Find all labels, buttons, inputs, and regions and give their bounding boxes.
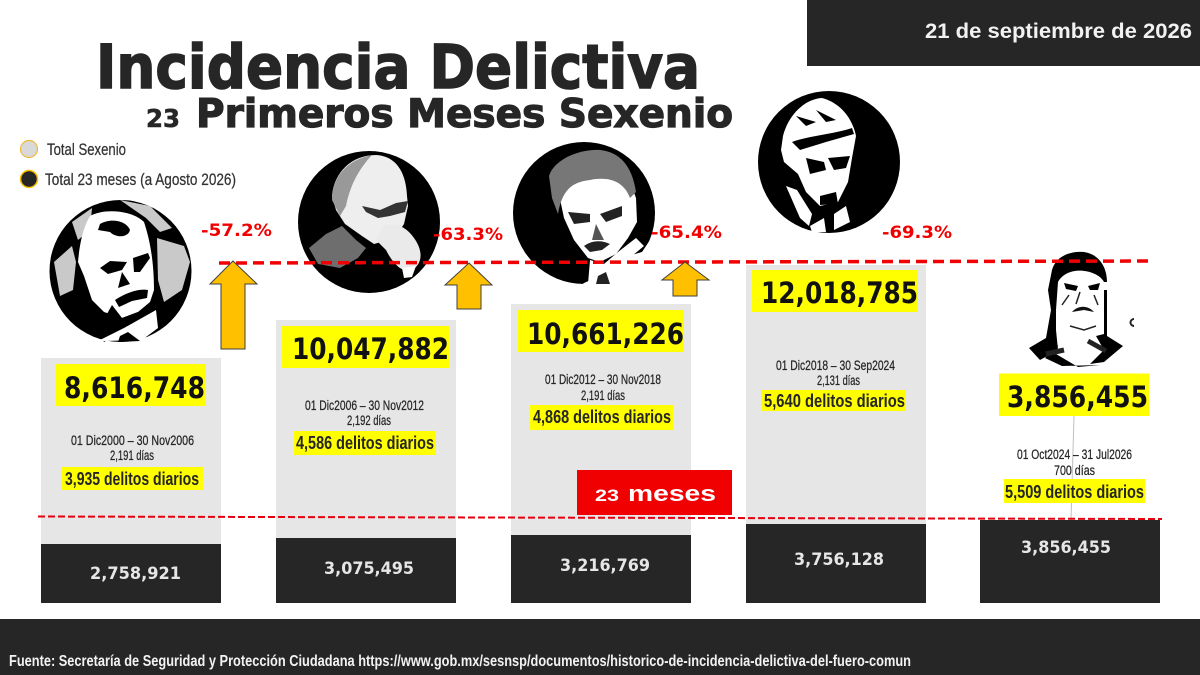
title: Incidencia Delictiva [96, 32, 700, 103]
column 1: 23 month bar [41, 544, 221, 603]
column 3: 23 month bar: 3,216,769 [560, 556, 650, 576]
column 2: Calderon total bar: 4,586 delitos diarios [296, 432, 434, 453]
column 1: Fox total bar [41, 358, 221, 544]
column 1: Fox total bar: 2,191 días [110, 448, 154, 463]
column 1: Fox total bar: 01 Dic2000 – 30 Nov2006 [71, 433, 194, 448]
percent: -65.4%: -65.4% [651, 223, 723, 242]
column 3: Pena total bar: 2,191 días [581, 388, 625, 403]
column 4: 23 month bar [746, 524, 926, 603]
source footer [0, 619, 1200, 675]
column 5: Sheinbaum period: 5,509 delitos diarios [1005, 481, 1144, 502]
reference line: 23 months [38, 516, 1162, 519]
column 4: 23 month bar: 3,756,128 [794, 550, 884, 570]
column 1: 23 month bar: 2,758,921 [90, 564, 181, 584]
column 4: AMLO total bar: 12,018,785 [761, 276, 918, 310]
column 2: 23 month bar: 3,075,495 [324, 559, 414, 579]
portrait: Pena Nieto [513, 142, 662, 290]
date banner [807, 0, 1200, 66]
column 2: Calderon total bar [276, 320, 456, 538]
column 3: 23 month bar [511, 535, 691, 603]
percent: -57.2%: -57.2% [201, 221, 273, 240]
column 3: Pena total bar [511, 304, 691, 535]
subtitle: Primeros Meses Sexenio [196, 92, 733, 137]
column 1: Fox total bar: 3,935 delitos diarios [65, 468, 199, 489]
column 5: Sheinbaum period: 700 días [1054, 463, 1095, 478]
callout: 23 meses: meses [628, 481, 716, 506]
column 1: Fox total bar: 8,616,748 [64, 371, 205, 405]
column 3: Pena total bar: 10,661,226 [527, 317, 684, 351]
portrait: Fox [50, 200, 192, 342]
column 5: 23 month bar: 3,856,455 [1021, 538, 1111, 558]
column 2: Calderon total bar: 2,192 días [347, 413, 391, 428]
arrow 2 [445, 263, 492, 309]
column 2: Calderon total bar: 01 Dic2006 – 30 Nov2012 [305, 398, 424, 413]
percent: -63.3%: -63.3% [433, 225, 504, 244]
column 3: Pena total bar: 4,868 delitos diarios [533, 406, 671, 427]
column 4: AMLO total bar: 5,640 delitos diarios [764, 390, 905, 411]
callout: 23 meses: 23 [595, 486, 619, 505]
date banner: 21 de septiembre de 2026 [925, 20, 1192, 43]
portrait: Calderon [298, 151, 440, 293]
reference line: total [219, 261, 1152, 263]
percent: -69.3%: -69.3% [882, 223, 953, 242]
portrait: Lopez Obrador [758, 91, 900, 233]
callout: 23 meses [577, 470, 732, 515]
column 4: AMLO total bar: 01 Dic2018 – 30 Sep2024 [776, 358, 895, 373]
column 2: Calderon total bar: 10,047,882 [292, 332, 449, 366]
column 4: AMLO total bar [746, 265, 926, 524]
arrow 3 [662, 262, 709, 296]
column 2: 23 month bar [276, 538, 456, 603]
legend: Total 23 meses (a Agosto 2026) [45, 170, 236, 189]
column 5: Sheinbaum period: 3,856,455 [1007, 380, 1148, 414]
legend: Total Sexenio [47, 140, 126, 159]
column 4: AMLO total bar: 2,131 días [817, 373, 860, 388]
column 5: Sheinbaum period [999, 374, 1149, 520]
source footer: Fuente: Secretaría de Seguridad y Protección Ciudadana https://www.gob.mx/sesnsp/documentos/historico-de-incidencia-delictiva-del-fuero-comun [9, 653, 911, 670]
arrow 1 [210, 261, 257, 349]
column 5: 23 month bar [980, 520, 1160, 603]
column 3: Pena total bar: 01 Dic2012 – 30 Nov2018 [545, 372, 661, 387]
subtitle: 23 [146, 104, 180, 133]
portrait: Sheinbaum [1029, 252, 1134, 367]
legend [20, 140, 236, 189]
column 5: Sheinbaum period: 01 Oct2024 – 31 Jul2026 [1017, 447, 1132, 462]
